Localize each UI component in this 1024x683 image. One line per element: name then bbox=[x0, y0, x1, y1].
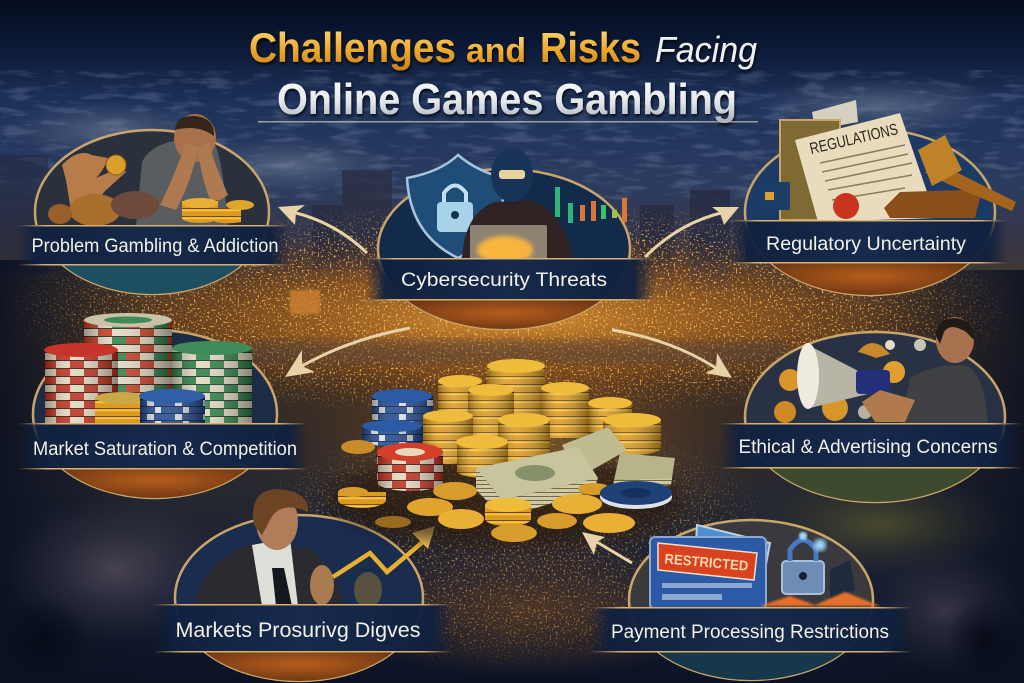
icon: shield and lock bbox=[407, 155, 505, 258]
label bar bbox=[153, 604, 453, 652]
label bar bbox=[18, 423, 308, 469]
arrow: to ethical bbox=[612, 330, 732, 378]
icon: rising arrow line bbox=[333, 541, 424, 577]
title: and bbox=[466, 32, 526, 70]
label: Regulatory Uncertainty bbox=[766, 234, 967, 255]
loose coins bbox=[338, 440, 635, 542]
arrow: cyber to problem gambling bbox=[278, 205, 367, 253]
icon: poker chip stacks bbox=[44, 313, 252, 424]
blue chip single bbox=[600, 481, 672, 509]
panel: markets pressure bbox=[153, 489, 453, 683]
label: Ethical & Advertising Concerns bbox=[738, 437, 998, 458]
label bar bbox=[18, 225, 290, 265]
icon: sparks bbox=[760, 592, 880, 606]
arrow: to payment bbox=[582, 532, 632, 563]
title bbox=[249, 24, 757, 124]
label: Payment Processing Restrictions bbox=[611, 622, 889, 643]
icon: regulations document bbox=[795, 113, 936, 222]
arrow: cyber to regulatory bbox=[645, 207, 739, 257]
label: Cybersecurity Threats bbox=[401, 270, 607, 291]
label: Markets Prosurivg Digves bbox=[176, 619, 420, 642]
arrow: to market saturation bbox=[285, 328, 410, 377]
icon: regulations document: REGULATIONS bbox=[808, 121, 900, 158]
icon: padlock bbox=[782, 532, 855, 600]
banknotes bbox=[476, 427, 675, 518]
label bar bbox=[719, 423, 1022, 468]
title: Risks bbox=[540, 24, 641, 71]
panel: problem gambling bbox=[18, 114, 290, 295]
title: Online Games Gambling bbox=[277, 75, 737, 124]
icon: coins floating bbox=[774, 339, 926, 423]
panel: ethical advertising bbox=[719, 317, 1022, 504]
icon: arrow head bbox=[412, 526, 435, 549]
label bar bbox=[729, 220, 1008, 263]
panel: payment restrictions bbox=[589, 520, 912, 682]
icon: hacker with laptop bbox=[462, 148, 572, 264]
red chips bbox=[377, 443, 443, 491]
panel: market saturation bbox=[18, 313, 308, 500]
icon: gavel bbox=[884, 135, 1016, 218]
panel: regulatory bbox=[729, 100, 1016, 297]
icon: man from behind bbox=[862, 317, 988, 424]
central coin pile bbox=[330, 359, 680, 545]
blue chips bbox=[362, 389, 433, 446]
icon: businessman bbox=[193, 489, 382, 608]
label bar bbox=[365, 258, 655, 300]
icon: folders bbox=[762, 100, 858, 220]
icon: megaphone bbox=[797, 343, 890, 409]
panel: cybersecurity bbox=[365, 148, 655, 331]
label: Problem Gambling & Addiction bbox=[32, 236, 278, 257]
title underline bbox=[258, 121, 758, 122]
icon: restricted card bbox=[650, 537, 766, 609]
icon: restricted card: RESTRICTED bbox=[664, 550, 749, 574]
icon: teddy bear and coins bbox=[48, 153, 254, 226]
label bar bbox=[589, 607, 912, 652]
title: Challenges bbox=[249, 24, 456, 71]
label: Market Saturation & Competition bbox=[33, 439, 297, 460]
candlestick chart bbox=[555, 187, 627, 223]
icon: distressed man bbox=[136, 114, 228, 226]
icon: back card bbox=[695, 525, 770, 570]
title: Facing bbox=[655, 29, 757, 70]
gold stacks bbox=[423, 359, 661, 478]
